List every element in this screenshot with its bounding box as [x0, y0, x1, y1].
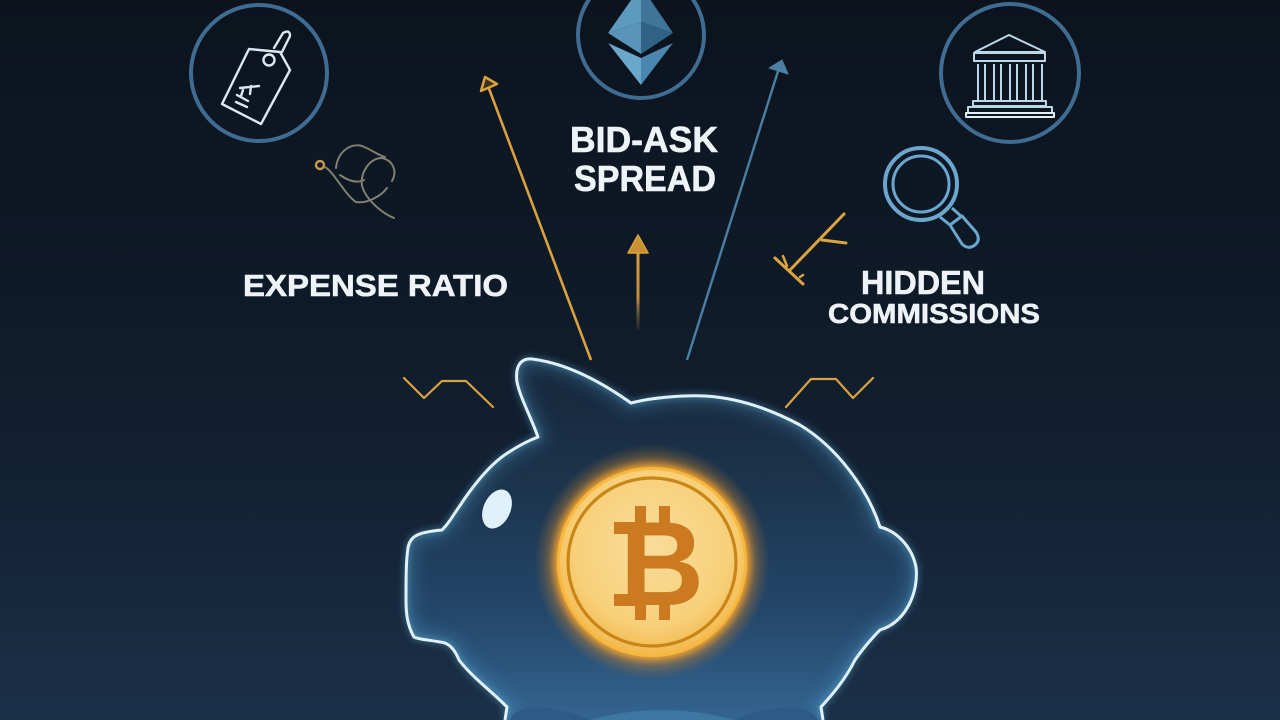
- arrow: right blue: [687, 60, 788, 360]
- label: hidden commissions: COMMISSIONS: [828, 298, 1040, 329]
- icon: ethereum in circle: [578, 0, 704, 98]
- icon: price tag in circle: [191, 5, 327, 141]
- bitcoin symbol: B: [620, 497, 704, 631]
- icon: orange broken branch: [775, 214, 846, 284]
- piggy bank: [406, 359, 916, 720]
- pig eye: [476, 485, 518, 533]
- arrow: left orange: [481, 77, 591, 360]
- label: bid-ask spread: SPREAD: [574, 158, 716, 199]
- icon: left zigzag: [404, 378, 493, 407]
- pig body: [406, 359, 916, 720]
- icon: bank building in circle: [941, 4, 1079, 142]
- arrow: center orange: [628, 235, 648, 330]
- label: expense ratio: EXPENSE RATIO: [243, 268, 508, 303]
- bitcoin coin: [534, 444, 770, 680]
- icon: magnifying glass: [885, 148, 978, 247]
- label: hidden commissions: [828, 264, 1040, 329]
- icon: tangled squiggle: [316, 145, 394, 218]
- icon: right zigzag: [786, 378, 873, 407]
- label: bid-ask spread: BID-ASK: [570, 119, 718, 160]
- label: hidden commissions: HIDDEN: [861, 264, 985, 301]
- label: bid-ask spread: [570, 119, 718, 199]
